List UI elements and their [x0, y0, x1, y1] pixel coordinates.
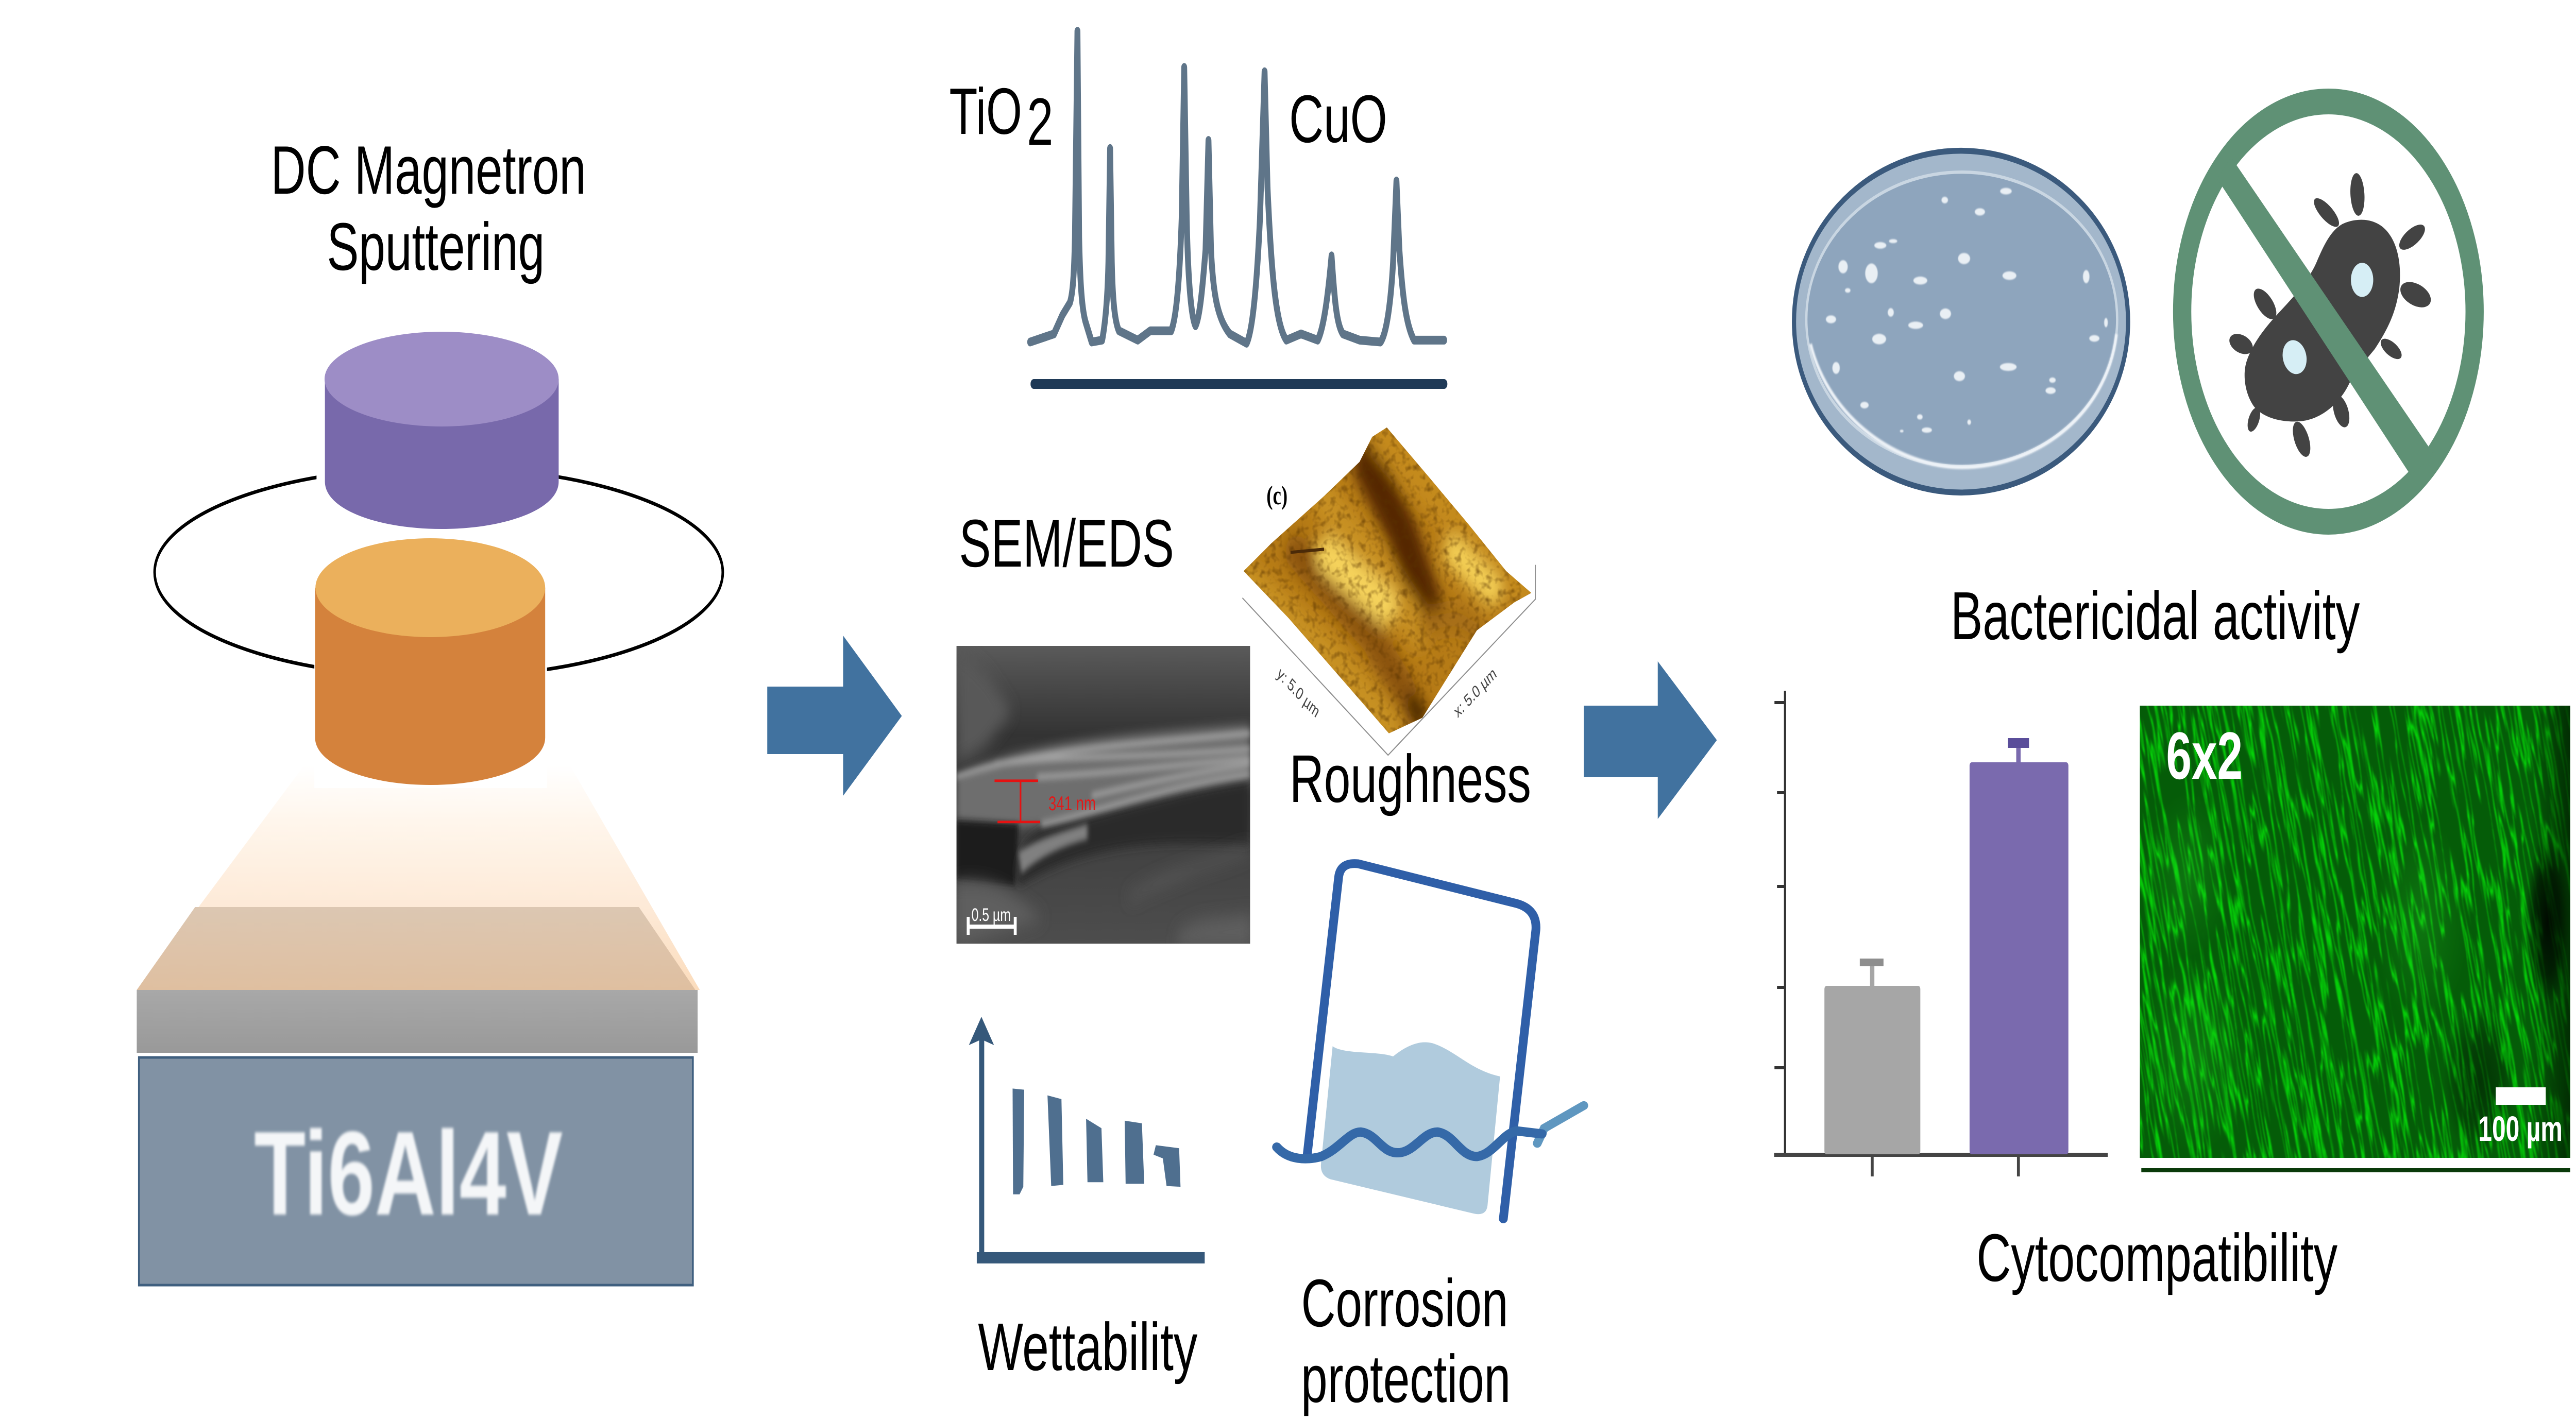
- grey coating layer: [137, 990, 698, 1053]
- heading: Wettability: Wettability: [978, 1309, 1197, 1385]
- heading: Corrosion protection: Corrosion: [1301, 1266, 1508, 1341]
- icon: purple target cylinder: [316, 332, 558, 529]
- heading: DC Magnetron Sputtering: DC Magnetron: [271, 132, 586, 209]
- panel: SEM/EDS: [956, 506, 1250, 944]
- wettability chart icon: [969, 1017, 1205, 1263]
- label: 6x2: 6x2: [2166, 718, 2243, 793]
- bar chart: [1774, 691, 2108, 1176]
- label: x 5.0 um: x: 5.0 µm: [1451, 664, 1499, 722]
- panel: corrosion protection: [1277, 864, 1584, 1417]
- heading: Cytocompatibility: Cytocompatibility: [1976, 1220, 2337, 1296]
- bar: control: [1824, 959, 1920, 1154]
- label: y 5.0 um: y: 5.0 µm: [1275, 664, 1323, 722]
- prohibition slash: [2217, 157, 2434, 475]
- icon: orange target cylinder: [314, 538, 547, 788]
- sputtering plume: [137, 765, 700, 990]
- label: 0.5 um: 0.5 µm: [972, 906, 1011, 925]
- substrate block: Ti6Al4V: [139, 1057, 693, 1285]
- panel: bactericidal activity: [1794, 101, 2475, 654]
- label: 100 um: 100 µm: [2478, 1109, 2563, 1149]
- label: CuO: CuO: [1289, 81, 1387, 157]
- deposited film: [137, 907, 696, 990]
- XRD curve: [1030, 31, 1444, 343]
- heading: Bactericidal activity: Bactericidal activity: [1951, 578, 2360, 654]
- icon: petri dish: [1794, 151, 2128, 492]
- panel: XRD pattern: [949, 31, 1447, 389]
- beaker icon: [1277, 864, 1584, 1219]
- scale bar: [2496, 1087, 2546, 1105]
- bacterium: [2228, 173, 2433, 461]
- AFM axes: [1242, 565, 1535, 755]
- XRD baseline axis: [1030, 379, 1447, 389]
- scale bar: [968, 917, 1015, 935]
- heading: DC Magnetron Sputtering: Sputtering: [327, 209, 545, 285]
- label: (c): (c): [1266, 481, 1287, 510]
- SEM micrograph: [956, 646, 1250, 944]
- fluorescence micrograph: [2140, 706, 2570, 1158]
- panel: cytocompatibility: [1774, 691, 2570, 1296]
- label: 341 nm: 341 nm: [1048, 792, 1096, 815]
- heading: Roughness: Roughness: [1290, 741, 1531, 817]
- label: TiO2: TiO: [949, 75, 1022, 148]
- panel: roughness AFM: [1238, 424, 1535, 817]
- bar: coated: [1970, 738, 2069, 1154]
- micrograph lower edge strip: [2141, 1168, 2570, 1172]
- heading: Corrosion protection: protection: [1301, 1341, 1511, 1417]
- AFM surface: [1238, 424, 1535, 755]
- icon: no bacteria sign: [2182, 101, 2475, 522]
- panel: DC magnetron sputtering: [137, 132, 723, 1285]
- substrate block: Ti6Al4V: Ti6Al4V: [254, 1106, 563, 1240]
- arrow: process to characterisation: [767, 636, 902, 796]
- magnetron ring: [155, 467, 723, 677]
- panel: wettability: [969, 1017, 1205, 1385]
- label: TiO2: 2: [1027, 84, 1053, 159]
- arrow: characterisation to biological response: [1584, 661, 1717, 819]
- heading: SEM/EDS: SEM/EDS: [959, 506, 1174, 582]
